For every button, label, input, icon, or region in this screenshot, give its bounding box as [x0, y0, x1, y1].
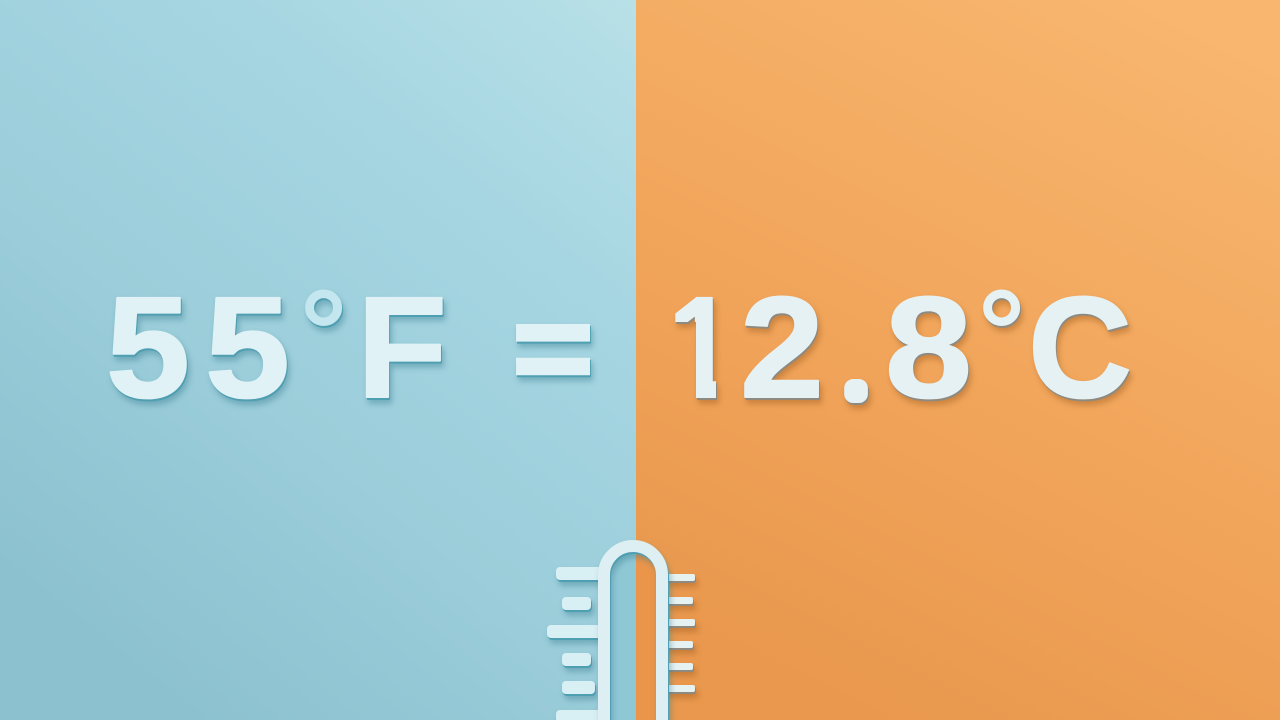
- thermometer tube: [604, 546, 662, 720]
- heading: 12.8°C: 1: [668, 267, 734, 428]
- heading: 55°F equals: °: [300, 266, 347, 398]
- icon: thermometer: [547, 546, 695, 720]
- heading: 12.8°C: [675, 290, 1133, 411]
- heading: 55°F equals: 5: [106, 267, 190, 428]
- heading: 55°F equals: 5: [205, 267, 290, 428]
- thermometer tube interior: [604, 546, 662, 720]
- heading: 12.8°C: 2: [740, 267, 824, 428]
- heading: 12.8°C: .: [850, 359, 862, 403]
- heading: 55°F equals: F: [357, 267, 447, 428]
- heading: 55°F equals: =: [512, 279, 594, 418]
- panel: cool blue side: [0, 0, 636, 720]
- heading: 12.8°C: 8: [885, 267, 972, 428]
- panel: warm orange side: [636, 0, 1280, 720]
- thermometer right scale ticks: [666, 574, 695, 692]
- heading: 55°F equals: [106, 266, 594, 428]
- heading: 12.8°C: C: [1028, 267, 1132, 428]
- heading: 12.8°C: °: [978, 266, 1025, 398]
- thermometer left scale ticks: [547, 567, 602, 720]
